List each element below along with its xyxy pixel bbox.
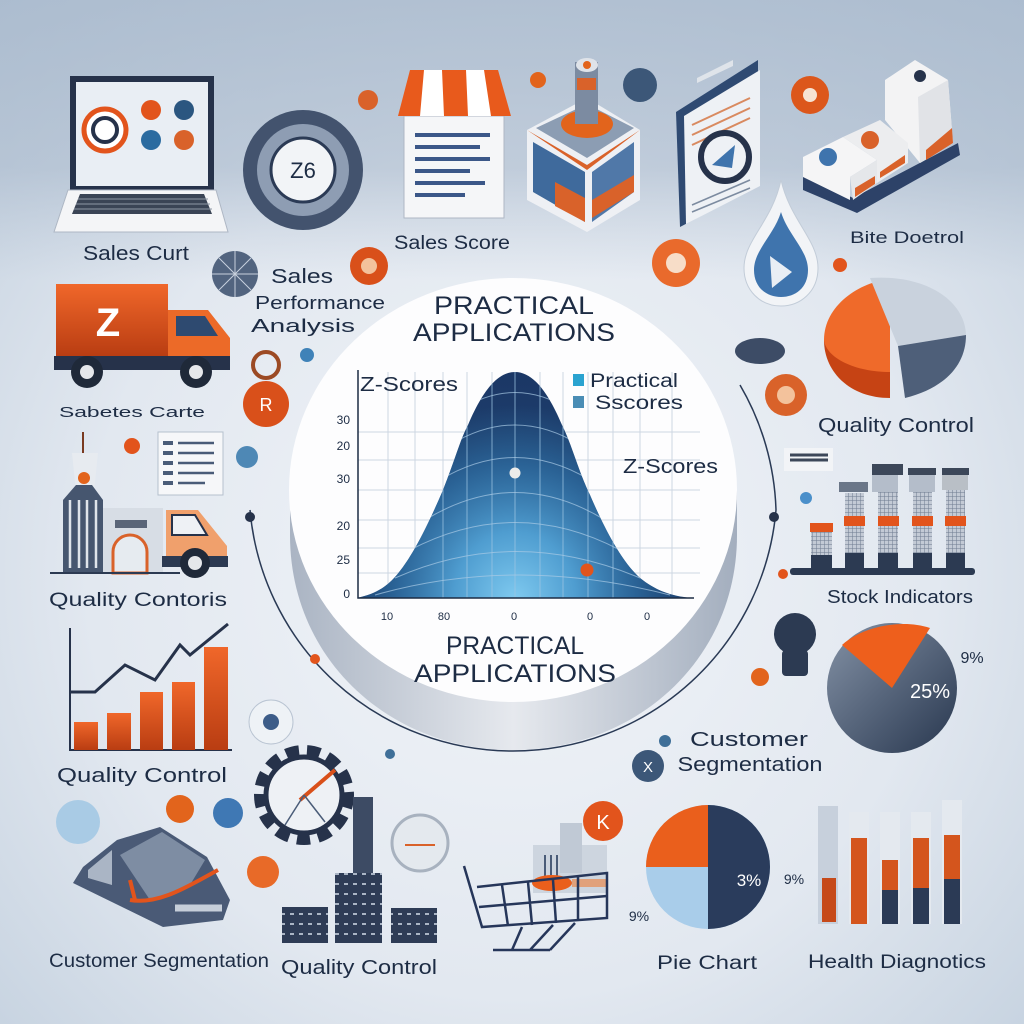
label: bite control: Bite Doetrol	[850, 228, 964, 247]
label: customer segmentation right: Segmentation	[678, 754, 822, 776]
heading: practical applications bottom: PRACTICAL	[446, 632, 584, 660]
y axis labels: 20	[337, 519, 350, 533]
label: customer segmentation right	[678, 729, 822, 776]
icon: factory blocks	[282, 797, 448, 943]
icon: fan ball	[212, 251, 258, 297]
icon: delivery truck orange	[54, 284, 230, 388]
label: z-scores right: Z-Scores	[623, 456, 718, 478]
icon: boxes on pallet	[803, 60, 960, 213]
icon: shopping cart	[464, 866, 607, 950]
icon: note card	[784, 448, 833, 471]
label: sales performance analysis: Analysis	[251, 316, 355, 336]
icon: turtle shape	[735, 338, 785, 364]
dots scattered	[124, 68, 847, 759]
label: quality contoris: Quality Contoris	[49, 590, 227, 611]
icon: orange flower small	[350, 247, 388, 285]
label: quality control right: Quality Control	[818, 415, 974, 437]
heading: practical applications bottom	[414, 632, 616, 688]
icon: warehouse and van	[50, 432, 228, 578]
x axis labels: 0	[511, 611, 517, 623]
label: sales performance analysis: Performance	[255, 293, 385, 313]
label: quality control bottom: Quality Control	[281, 957, 437, 979]
y axis labels	[337, 413, 350, 601]
icon: orange badge x	[583, 801, 623, 841]
heading: practical applications top: APPLICATIONS	[413, 319, 615, 347]
heading: practical applications bottom: APPLICATIONS	[414, 660, 616, 688]
icon: sphere	[249, 700, 293, 744]
label: customer segmentation left: Customer Segmentation	[49, 951, 269, 972]
icon: dial gauge: Z6	[290, 158, 316, 183]
pie chart: bottom: 9%	[784, 871, 804, 887]
label: sales curt: Sales Curt	[83, 243, 189, 265]
curve lighter core and contours	[361, 372, 677, 598]
icon: document sheet	[158, 432, 223, 495]
icon: delivery truck orange: Z	[96, 301, 120, 345]
label: sabetes carte: Sabetes Carte	[59, 404, 205, 421]
label: customer segmentation right: Customer	[690, 729, 808, 751]
peak marker	[510, 468, 520, 478]
orbit ring	[250, 385, 776, 751]
icon: factory tower cube	[527, 58, 640, 232]
icon: dial gauge	[243, 110, 363, 230]
icons: small badges	[56, 795, 279, 888]
icon: water drop	[744, 180, 818, 306]
pie chart: bottom: 3%	[737, 871, 761, 890]
icon: orange wheel	[765, 374, 807, 416]
icon: building behind cart	[532, 823, 607, 893]
x axis labels: 0	[587, 611, 593, 623]
chart legend	[573, 371, 683, 414]
label: sales score: Sales Score	[394, 233, 510, 254]
icon: columns	[790, 464, 975, 575]
label: pie chart: Pie Chart	[657, 953, 758, 974]
y axis labels: 30	[337, 413, 350, 427]
y axis labels: 20	[337, 439, 350, 453]
icon: test tubes	[818, 800, 962, 924]
pie chart: right	[827, 623, 984, 753]
chart legend: Practical	[590, 371, 678, 392]
bell curve chart	[337, 370, 700, 620]
icon: orange badge x: K	[596, 812, 610, 834]
x axis labels: 10	[381, 611, 393, 623]
heading: practical applications top	[413, 292, 615, 347]
icon: orange badge	[791, 76, 829, 114]
label: sales performance analysis: Sales	[271, 266, 333, 288]
x axis labels: 0	[644, 611, 650, 623]
chart legend: Sscores	[595, 393, 683, 414]
pie chart: right: 9%	[960, 650, 984, 667]
icon: kettlebell lock	[243, 352, 289, 427]
y axis labels: 30	[337, 472, 350, 486]
icon: kettlebell lock: R	[260, 395, 272, 415]
orange marker	[580, 564, 594, 576]
label: health diagnostics: Health Diagnotics	[808, 952, 986, 973]
top background shade	[0, 0, 1024, 280]
disc top	[289, 278, 737, 702]
label: quality control left: Quality Control	[57, 765, 227, 787]
label: sales performance analysis	[251, 266, 385, 336]
label: z-scores left: Z-Scores	[360, 374, 458, 396]
icon: head silhouette	[774, 613, 816, 676]
pie chart: bottom: 9%	[629, 908, 649, 924]
x axis labels	[381, 611, 650, 623]
icon: blue badge x: X	[643, 759, 653, 776]
disc side	[290, 490, 737, 750]
icon: server machine	[73, 827, 230, 927]
pie chart: bottom	[629, 805, 804, 929]
bar and line chart	[70, 624, 232, 750]
icon: laptop	[54, 76, 228, 232]
heading: practical applications top: PRACTICAL	[434, 292, 594, 320]
icon: blue badge x	[632, 750, 664, 782]
icon: shop awning	[398, 70, 511, 218]
chart grid	[358, 372, 700, 598]
icon: gear with gauge	[260, 751, 348, 839]
x axis labels: 80	[438, 611, 450, 623]
bell curve	[357, 372, 692, 598]
y axis labels: 25	[337, 553, 350, 567]
icon: document with ring	[676, 60, 760, 227]
pie chart: right: 25%	[910, 681, 950, 703]
pie chart: quality control	[824, 278, 966, 398]
icon: orange flower	[652, 239, 700, 287]
axes	[358, 370, 694, 598]
y axis labels: 0	[343, 587, 350, 601]
central disc panel	[289, 278, 737, 795]
label: stock: Stock Indicators	[827, 587, 973, 607]
